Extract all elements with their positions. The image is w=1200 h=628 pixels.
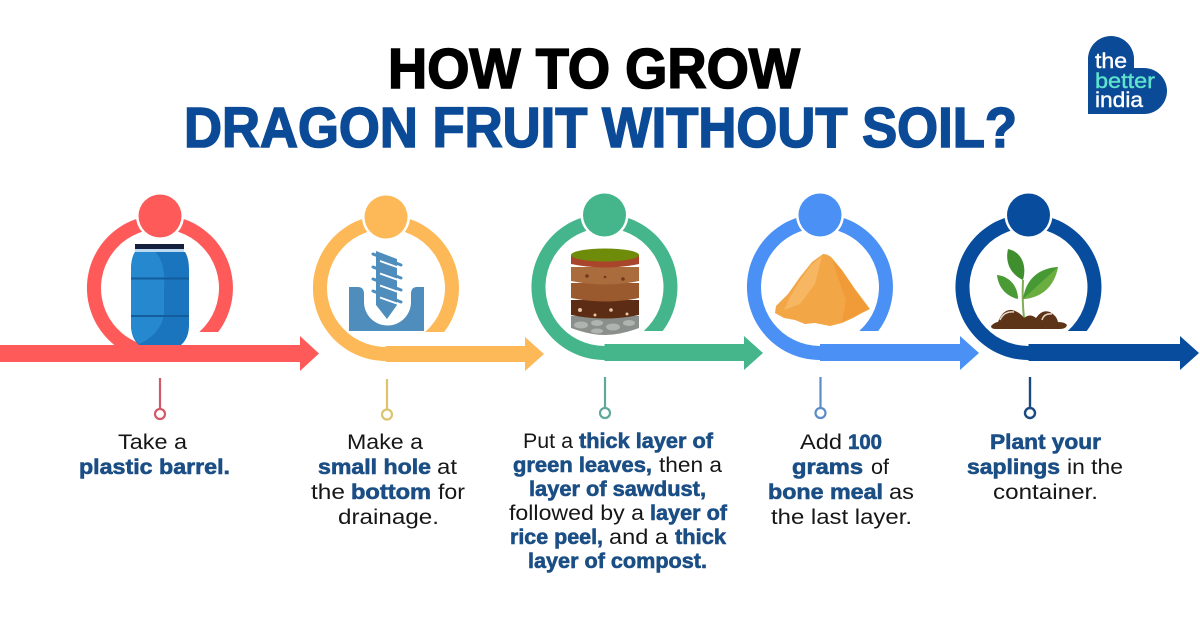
text: step 3: layer of	[650, 502, 728, 525]
text: step 3: then a	[659, 454, 722, 477]
text: step 3	[509, 430, 728, 573]
text: step 3: layer of compost.	[528, 550, 707, 573]
text: step 4: of	[871, 456, 889, 479]
text: step 1	[79, 431, 230, 479]
connector: step 1	[155, 378, 165, 419]
text: step 2: small hole	[318, 456, 431, 479]
text: step 3: followed by a	[509, 502, 644, 525]
text: step 2	[311, 431, 465, 529]
text: step 5: container.	[993, 481, 1098, 504]
text: step 4: Add	[800, 431, 842, 454]
step 2: arrow and ring	[313, 193, 544, 371]
logo: the better india: better	[1095, 70, 1155, 93]
icon: plastic barrel	[131, 244, 189, 345]
text: step 4: 100	[848, 431, 882, 454]
text: step 4: as	[889, 481, 914, 504]
text: step 2: drainage.	[338, 506, 439, 529]
text: step 4: grams	[792, 456, 863, 479]
text: step 2: Make a	[347, 431, 423, 454]
logo: the better india: india	[1095, 89, 1143, 112]
icon: bone meal pile	[775, 254, 870, 326]
title: HOW TO GROW	[388, 37, 800, 101]
text: step 1: Take a	[118, 431, 187, 454]
text: step 4: the last layer.	[771, 506, 912, 529]
step 1: arrow and ring	[0, 192, 319, 371]
logo: the better india: the	[1095, 50, 1127, 73]
connector: step 2	[382, 379, 392, 420]
title	[184, 37, 1017, 160]
logo: the better india	[1088, 36, 1167, 114]
title: DRAGON FRUIT WITHOUT SOIL?	[184, 96, 1017, 160]
text: step 1: plastic barrel.	[79, 456, 230, 479]
icon: sapling	[991, 249, 1067, 329]
connector: step 3	[600, 377, 610, 418]
text: step 4	[768, 431, 914, 529]
text: step 5	[967, 431, 1123, 504]
text: step 2: the	[311, 481, 345, 504]
icon: soil layers	[571, 248, 639, 335]
text: step 3: thick	[675, 526, 726, 549]
step 5: arrow and ring	[955, 191, 1199, 370]
text: step 5: saplings	[967, 456, 1060, 479]
text: step 3: rice peel,	[510, 526, 603, 549]
text: step 5: Plant your	[990, 431, 1101, 454]
text: step 3: and a	[609, 526, 668, 549]
text: step 3: Put a	[523, 430, 573, 453]
text: step 2: for	[438, 481, 465, 504]
text: step 3: green leaves,	[513, 454, 652, 477]
text: step 2: at	[437, 456, 457, 479]
icon: drill and hole	[349, 251, 424, 331]
step 3: arrow and ring	[531, 191, 763, 370]
connector: step 4	[816, 377, 826, 418]
text: step 3: thick layer of	[579, 430, 714, 453]
text: step 3: layer of sawdust,	[529, 478, 706, 501]
text: step 5: in the	[1067, 456, 1123, 479]
connector: step 5	[1025, 377, 1035, 418]
text: step 4: bone meal	[768, 481, 883, 504]
text: step 2: bottom	[351, 481, 431, 504]
step 4: arrow and ring	[747, 191, 979, 370]
